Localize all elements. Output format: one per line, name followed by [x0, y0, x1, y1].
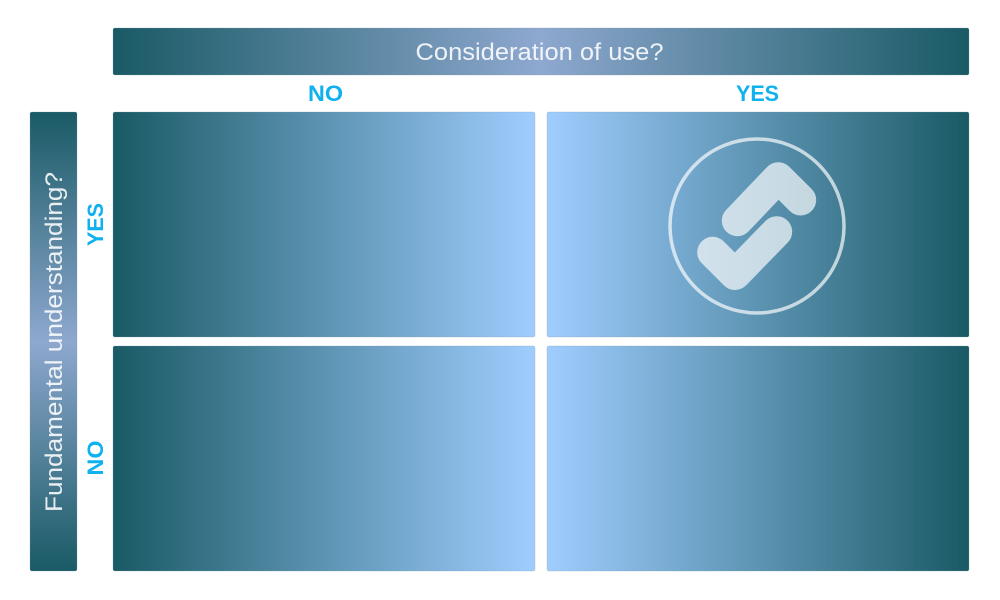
panel: top right quadrant [547, 112, 969, 337]
panel: bottom left quadrant [113, 346, 535, 571]
icon: circled double check logo [670, 139, 844, 313]
top header bar: Consideration of use?: Consideration of use? [416, 39, 664, 66]
panel: top left quadrant [113, 112, 535, 337]
column label: NO: NO [308, 81, 343, 106]
panel: bottom right quadrant [547, 346, 969, 571]
row label: YES: YES [83, 203, 108, 246]
column label: YES: YES [736, 81, 779, 106]
row label: NO: NO [83, 440, 108, 476]
side header bar: Fundamental understanding?: Fundamental understanding? [41, 172, 68, 512]
top header bar: Consideration of use? [113, 28, 969, 75]
side header bar: Fundamental understanding? [30, 112, 77, 571]
